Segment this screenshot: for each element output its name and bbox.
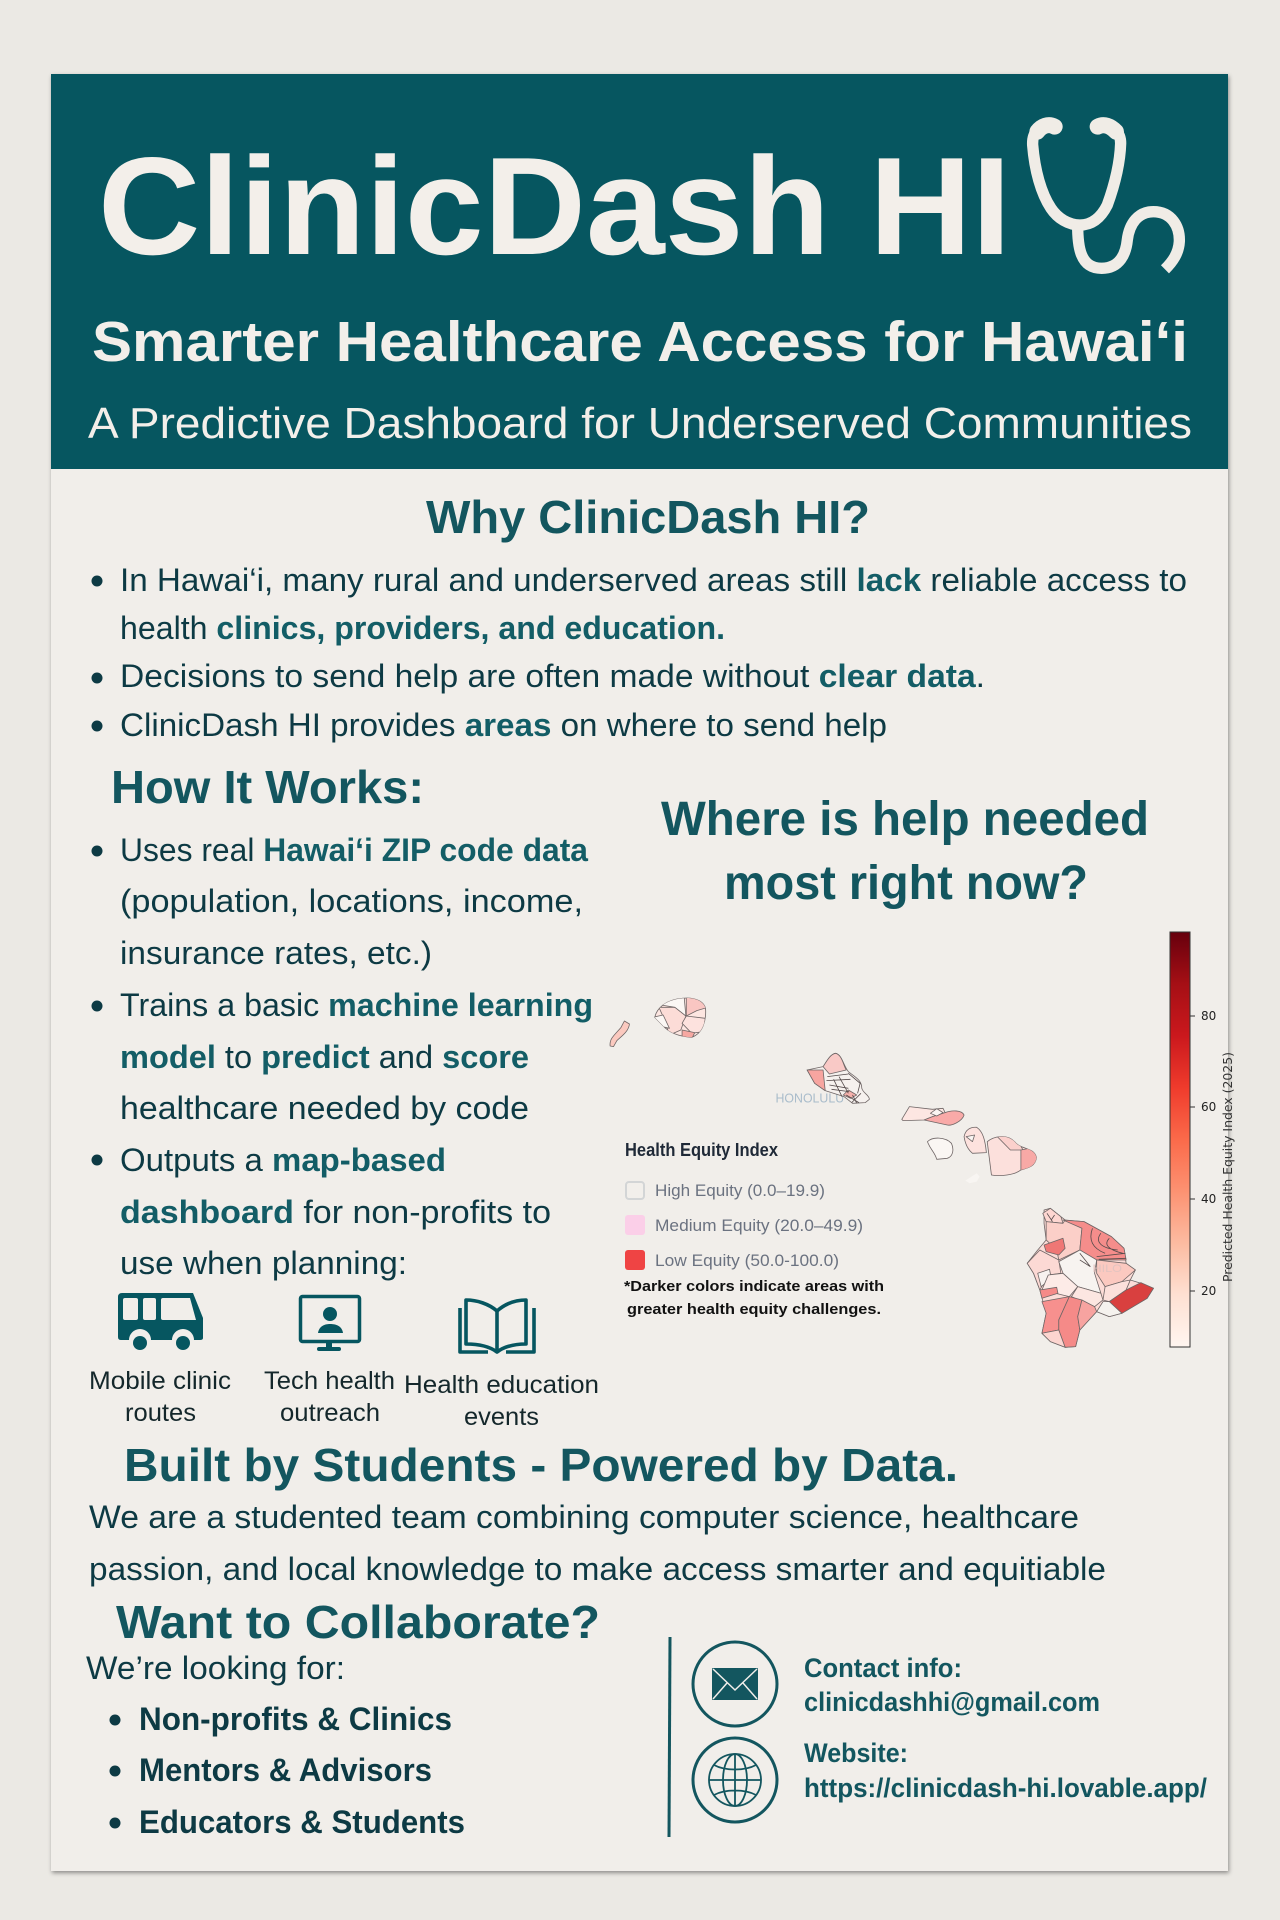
chart: colorbar: 20 [1201, 1284, 1216, 1298]
chart: colorbar: 40 [1201, 1192, 1216, 1206]
heading: why: Why ClinicDash HI? [426, 491, 870, 543]
text block: contact info: clinicdashhi@gmail.com [804, 1687, 1100, 1717]
city label: Hilo: HILO [1092, 1262, 1122, 1275]
label: tech health outreach [264, 1367, 395, 1427]
heading: where is help needed [661, 793, 1149, 910]
list: partners: Mentors & Advisors [139, 1752, 432, 1788]
text block: how bullets: Trains a basic machine learning [120, 987, 593, 1023]
island detail: Oahu districts [826, 1073, 861, 1103]
text block: team description [89, 1499, 1106, 1587]
text block: how bullets: Uses real Hawai‘i ZIP code data [120, 832, 588, 868]
legend: health equity index [625, 1140, 863, 1270]
island: Molokai [902, 1107, 964, 1125]
map: Hawaii health equity choropleth [610, 997, 1153, 1347]
heading: how it works: How It Works: [111, 761, 424, 813]
text block: contact info [804, 1653, 1100, 1717]
list: partners: Non-profits & Clinics [139, 1701, 452, 1737]
text block: website [804, 1738, 1207, 1803]
text block: website: Website: [804, 1738, 908, 1768]
text block: how bullets: Outputs a map-based [120, 1142, 446, 1178]
label: mobile clinic routes: Mobile clinic [89, 1367, 231, 1395]
chart: colorbar [1170, 932, 1235, 1347]
text block: how bullets: dashboard for non-profits to [120, 1194, 551, 1230]
label: mobile clinic routes [89, 1367, 231, 1427]
tagline: A Predictive Dashboard for Underserved Communities [88, 399, 1192, 448]
text block: why bullets: health clinics, providers, and education. [120, 610, 725, 646]
text block: looking for: We’re looking for: [86, 1650, 345, 1686]
panel: header banner [51, 74, 1228, 469]
island: Maui [964, 1127, 1038, 1176]
label: health education events: Health education [404, 1371, 599, 1399]
icon: open book [460, 1300, 534, 1352]
note: darker colors [624, 1278, 884, 1318]
island: Kahoolawe [965, 1173, 980, 1183]
legend: health equity index: Low Equity (50.0-100.0) [655, 1251, 839, 1270]
chart: colorbar: 80 [1201, 1009, 1216, 1023]
chart: colorbar: Predicted Health Equity Index (2025) [1221, 1052, 1235, 1282]
legend: health equity index: Medium Equity (20.0–49.9) [655, 1216, 863, 1235]
island: Kauai [653, 997, 708, 1039]
text block: how bullets: healthcare needed by code [120, 1090, 529, 1126]
city label: Honolulu: HONOLULU [776, 1091, 844, 1106]
text block: why bullets: Decisions to send help are often made without clear data. [120, 658, 985, 694]
list: partners: Educators & Students [139, 1804, 465, 1840]
icon: envelope [693, 1642, 777, 1726]
icon: bus [118, 1293, 203, 1350]
heading: built by students: Built by Students - Powered by Data. [124, 1439, 958, 1491]
text block: how bullets [92, 832, 593, 1281]
text block: how bullets: use when planning: [120, 1245, 407, 1281]
text block: team description: We are a studented team combining computer science, healthcare [89, 1499, 1079, 1535]
list: partners [110, 1701, 465, 1840]
text block: how bullets: insurance rates, etc.) [120, 935, 432, 971]
legend: health equity index: High Equity (0.0–19.9) [655, 1181, 825, 1200]
text block: website: https://clinicdash-hi.lovable.app/ [804, 1773, 1207, 1803]
text block: why bullets [92, 562, 1187, 743]
label: tech health outreach: Tech health [264, 1367, 395, 1395]
label: tech health outreach: outreach [280, 1399, 380, 1427]
text block: team description: passion, and local knowledge to make access smarter and equitiable [89, 1551, 1106, 1587]
text block: contact info: Contact info: [804, 1653, 962, 1683]
label: health education events: events [464, 1403, 539, 1431]
label: mobile clinic routes: routes [125, 1399, 196, 1427]
icon: globe [693, 1738, 777, 1822]
island: Lanai [927, 1138, 953, 1159]
island detail: Hamakua districts [1047, 1213, 1126, 1267]
legend: health equity index: Health Equity Index [625, 1140, 778, 1160]
chart: colorbar: 60 [1201, 1100, 1216, 1114]
island: Oahu [807, 1053, 869, 1103]
text block: why bullets: ClinicDash HI provides areas on where to send help [120, 707, 887, 743]
text block: how bullets: (population, locations, income, [120, 883, 583, 919]
note: darker colors: *Darker colors indicate areas with [624, 1278, 884, 1295]
island: Hawaii big island [1027, 1208, 1153, 1347]
icon: stethoscope [1033, 125, 1179, 269]
title: ClinicDash HI [98, 129, 1011, 284]
heading: want to collaborate: Want to Collaborate? [116, 1596, 600, 1648]
island: Niihau [610, 1021, 629, 1047]
icon: monitor with person [300, 1296, 360, 1351]
label: health education events [404, 1371, 599, 1431]
subtitle: Smarter Healthcare Access for Hawai‘i [92, 310, 1188, 374]
note: darker colors: greater health equity challenges. [627, 1301, 881, 1318]
heading: where is help needed: most right now? [724, 857, 1088, 910]
text block: how bullets: model to predict and score [120, 1039, 529, 1075]
divider: contact [669, 1637, 670, 1837]
heading: where is help needed: Where is help needed [661, 793, 1149, 846]
text block: why bullets: In Hawai‘i, many rural and underserved areas still lack reliable access to [120, 562, 1187, 598]
